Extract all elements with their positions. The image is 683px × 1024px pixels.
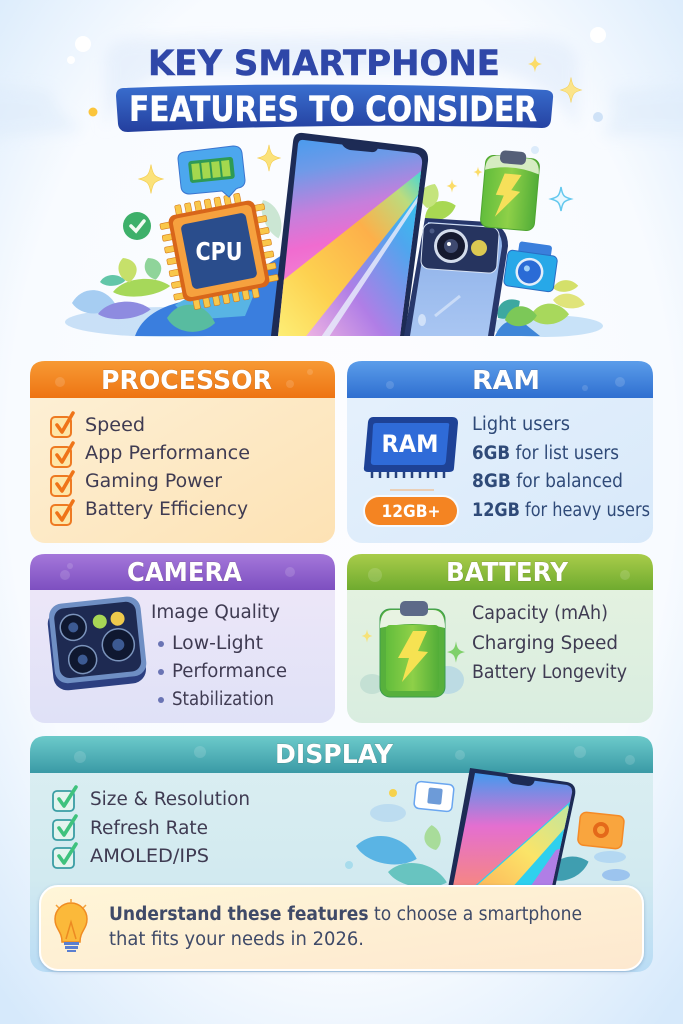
panel: camera [30,554,335,723]
processor checklist: Battery Efficiency [85,499,248,520]
processor checklist [51,413,250,525]
battery list [472,603,627,683]
battery list: Battery Longevity [472,662,627,683]
display phone [448,768,576,885]
processor heading: PROCESSOR [101,366,272,396]
callout [40,886,643,970]
panel: battery [347,554,653,723]
panel: processor [30,361,335,543]
battery header [347,554,653,590]
ram tiers [472,414,650,521]
ram tiers: 12GB for heavy users [472,500,650,521]
panel: display [30,736,653,972]
title [116,44,553,132]
camera list [151,602,287,710]
camera list: Low-Light [172,633,263,654]
ram header [347,361,653,398]
sparkles [139,56,582,211]
ram tiers: Light users [472,414,570,435]
small blue camera [503,240,559,292]
phone notch [340,139,379,152]
camera list: Stabilization [172,689,274,710]
title banner [116,84,553,132]
processor checklist: Speed [85,415,145,436]
callout text [109,904,582,950]
processor checklist: App Performance [85,443,250,464]
ram chip icon: RAM [382,430,438,458]
green check badge [123,212,151,240]
hero illustration [65,56,603,340]
display checklist [53,787,250,868]
battery icon [480,149,541,231]
cpu chip icon [157,189,281,313]
background brush decoration [0,27,683,154]
orange settings tile [577,812,625,849]
foliage [65,181,603,337]
ram heading: RAM [472,366,540,396]
cpu chip icon: CPU [196,237,242,266]
camera header [30,554,335,590]
callout text: Understand these features to choose a smartphone [109,904,582,925]
display foliage [345,789,630,892]
ram chip icon [364,417,458,478]
processor checklist: Gaming Power [85,471,222,492]
battery list: Charging Speed [472,633,618,654]
battery icon large [360,601,465,697]
title line 1: KEY SMARTPHONE [148,44,500,84]
camera module icon [46,595,148,692]
main phone [270,130,430,340]
title line 2: FEATURES TO CONSIDER [129,90,537,130]
display heading: DISPLAY [275,740,394,770]
display header [30,736,653,773]
blue app tile [414,781,454,812]
camera heading: CAMERA [127,558,242,588]
battery list: Capacity (mAh) [472,603,608,624]
header speckle texture [55,369,635,765]
callout text: that fits your needs in 2026. [109,929,364,950]
processor header [30,361,335,398]
battery heading: BATTERY [446,558,569,588]
icon: light bulb [55,899,87,952]
ram tiers: 8GB for balanced [472,471,623,492]
panel: ram [347,361,653,543]
rear camera phone [404,218,508,336]
ram tiers: 6GB for list users [472,443,619,464]
camera list: Performance [172,661,287,682]
camera list: Image Quality [151,602,280,623]
display checklist: AMOLED/IPS [90,846,209,867]
12GB+ pill [363,490,459,527]
display checklist: Size & Resolution [90,789,250,810]
12GB+ pill: 12GB+ [382,502,440,522]
chat bubble with battery bars [178,146,245,197]
display checklist: Refresh Rate [90,818,208,839]
